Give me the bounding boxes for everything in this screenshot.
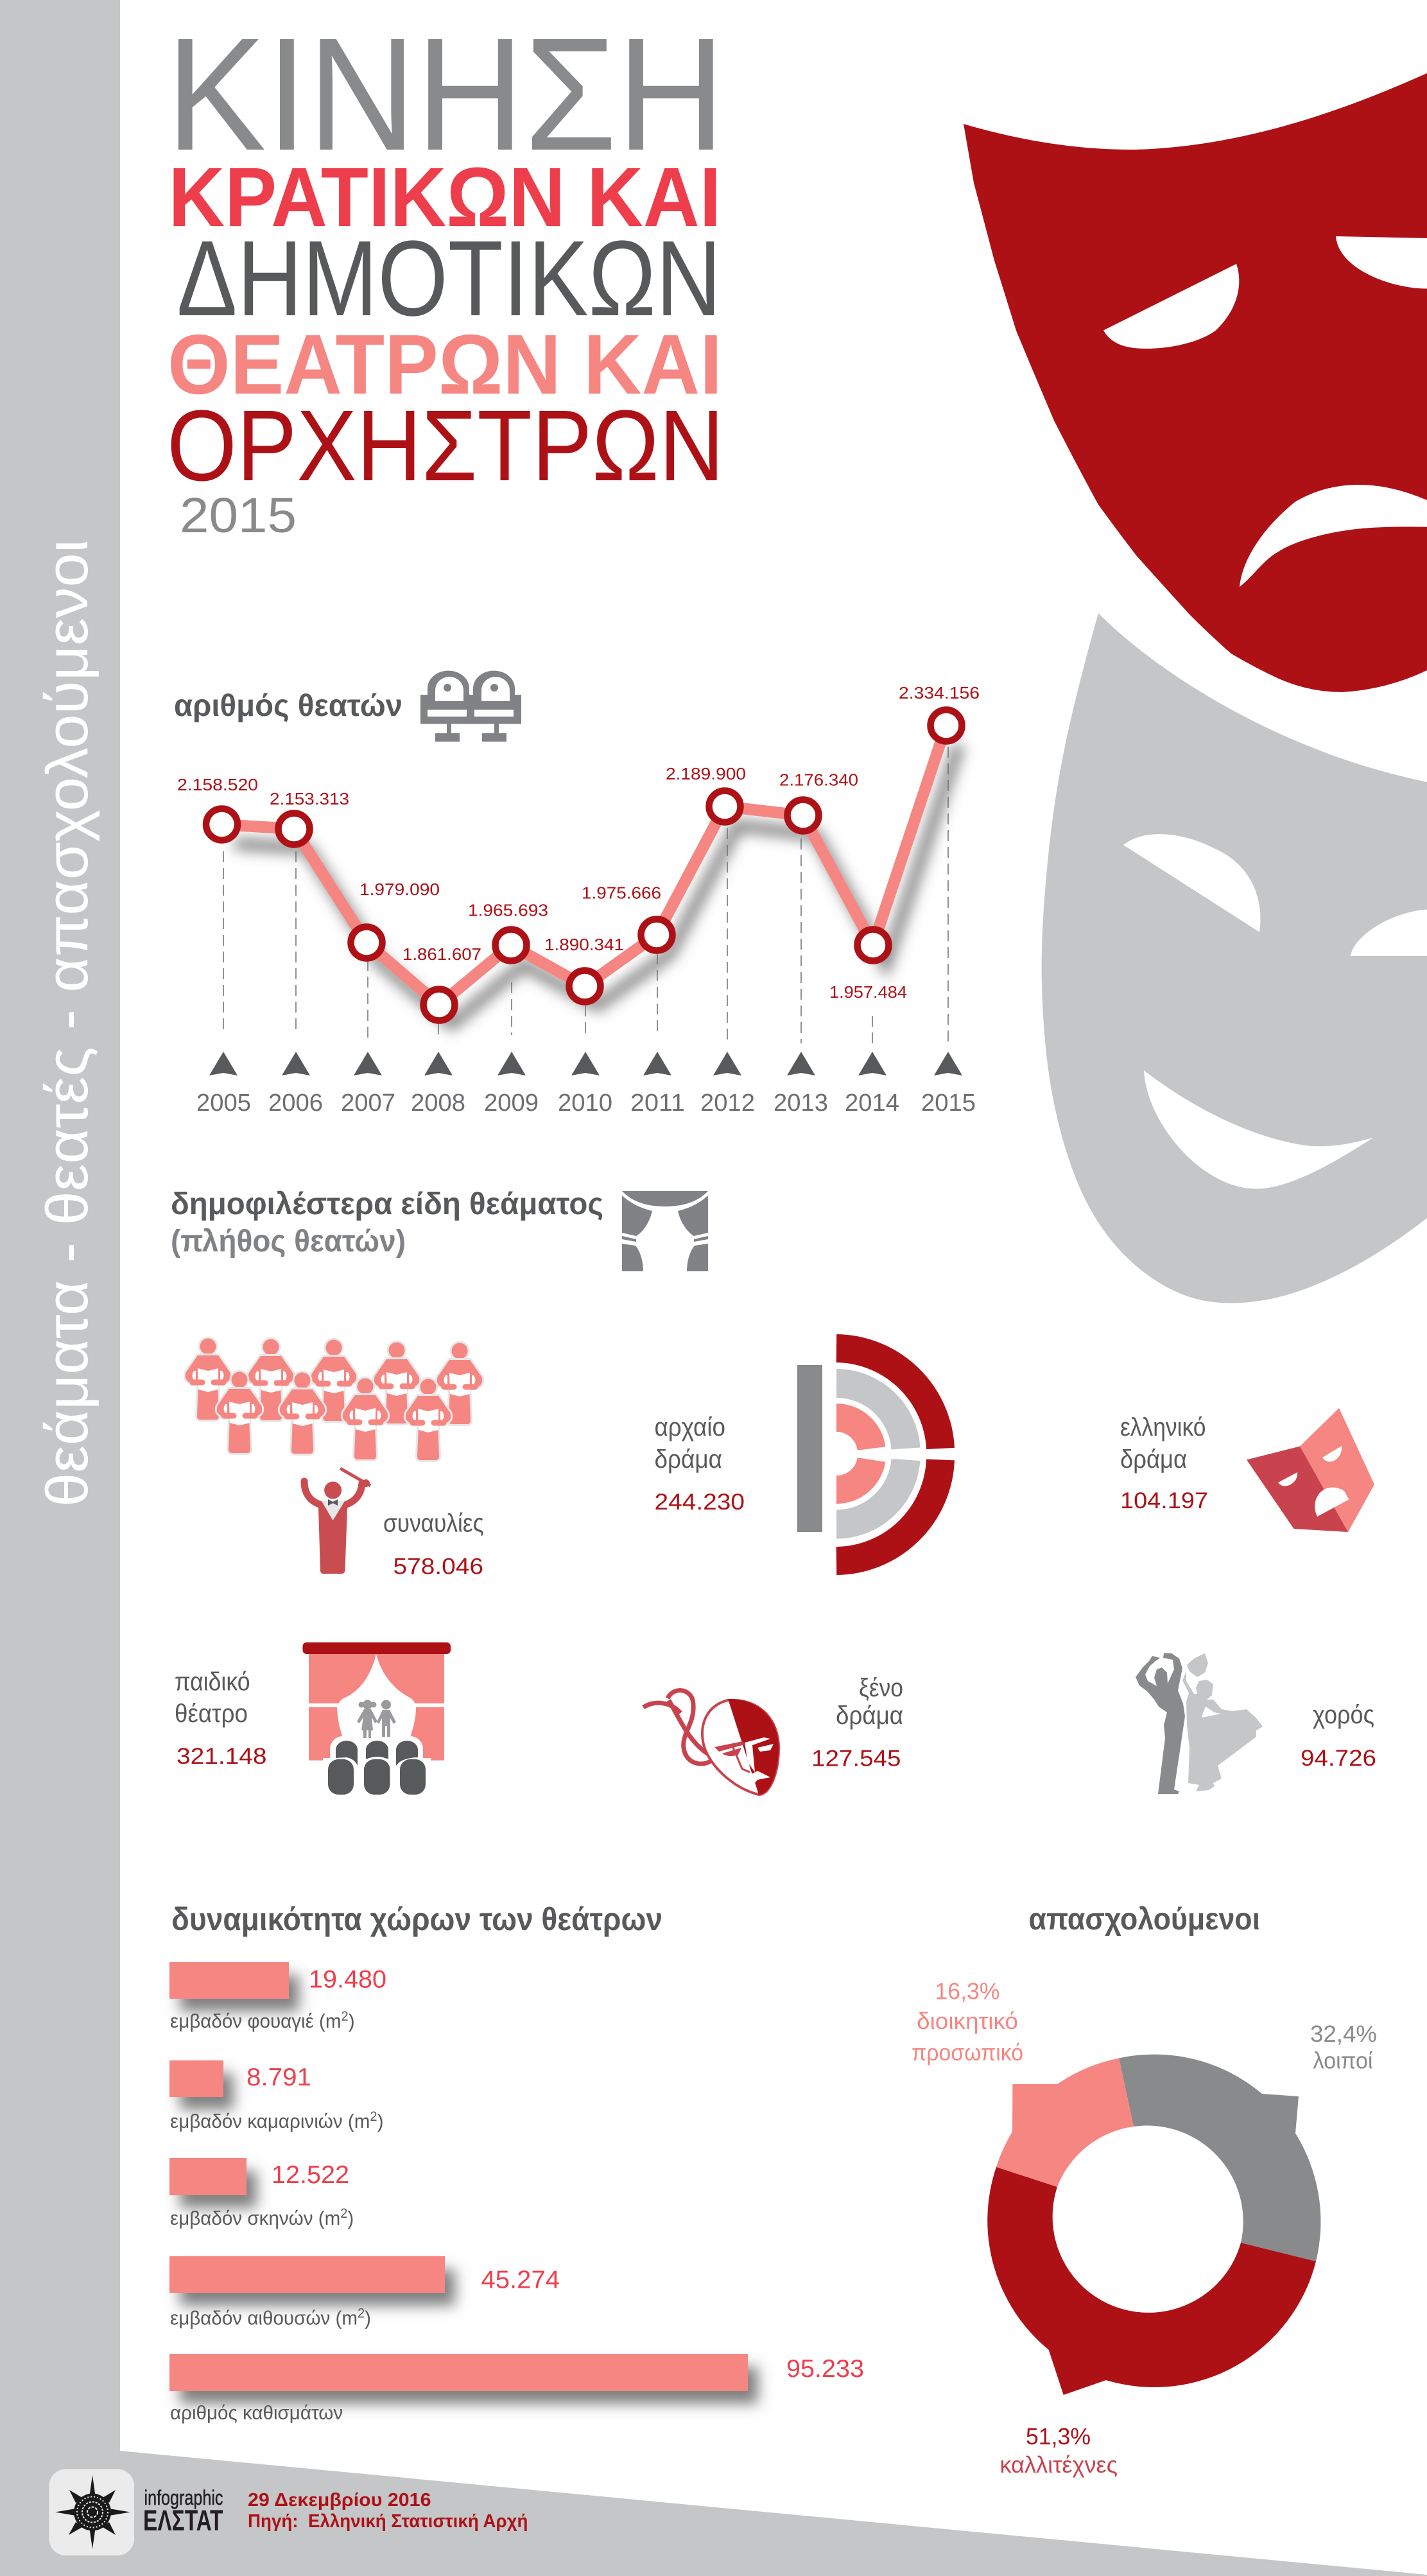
axis year labels: 2014 [845,1090,899,1117]
data value labels: 1.979.090 [359,880,440,899]
heading: employees: απασχολούμενοι [1028,1902,1260,1936]
label: administrative staff [912,1978,1023,2066]
sidebar vertical caption: θεάματα - θεατές - απασχολούμενοι [35,539,100,1507]
label: administrative staff: προσωπικό [912,2039,1023,2066]
icon: choir [186,1338,482,1460]
bar labels: 2 [342,2009,349,2024]
heading: theatre capacity: δυναμικότητα χώρων των θεάτρων [171,1901,662,1937]
icon: ancient theatre plan [797,1348,940,1561]
axis arrows [209,1052,962,1075]
data value labels: 1.975.666 [582,883,661,903]
axis year labels: 2008 [411,1090,465,1117]
bar values: 8.791 [246,2064,311,2091]
panel: theatre capacity bars [169,1901,864,2424]
title [166,4,725,543]
label: foreign drama: δράμα [836,1701,903,1730]
label: ancient drama [655,1413,725,1474]
value: children's theatre: 321.148 [177,1744,267,1769]
title year: 2015 [180,488,297,543]
label: greek drama [1120,1413,1206,1474]
icon: greek drama masks [1247,1408,1374,1532]
axis year labels [196,1090,976,1117]
data value labels: 2.153.313 [270,789,349,808]
axis year labels: 2007 [341,1090,395,1117]
axis year labels: 2010 [558,1090,612,1117]
label: greek drama: δράμα [1120,1445,1187,1474]
bar labels: ) [365,2308,371,2329]
axis year labels: 2005 [196,1090,251,1117]
data value labels: 1.861.607 [402,944,481,964]
axis year labels: 2006 [268,1090,323,1117]
bar labels: ) [349,2010,355,2032]
label: administrative staff: διοικητικό [917,2008,1018,2034]
value: greek drama: 104.197 [1120,1488,1208,1513]
data value labels: 2.334.156 [899,683,980,702]
donut segment: other staff [1119,2055,1320,2261]
bar labels: 2 [358,2306,365,2321]
wordmark: ΕΛΣΤΑΤ: ΕΛΣΤΑΤ [143,2504,223,2537]
title line: ΔΗΜΟΤΙΚΩΝ: ΔΗΜΟΤΙΚΩΝ [177,219,722,338]
label: concerts: συναυλίες [383,1509,484,1537]
label: ancient drama: δράμα [655,1445,722,1474]
label: other staff [1310,2021,1377,2074]
heading: most popular show types: δημοφιλέστερα είδη θεάματος [171,1187,603,1221]
bar labels: εμβαδόν καμαρινιών (m [170,2110,370,2132]
label: artists [1000,2423,1118,2478]
bar labels: 2 [370,2109,377,2124]
data value labels: 2.176.340 [779,770,858,790]
title line: ΚΙΝΗΣΗ: ΚΙΝΗΣΗ [166,4,725,184]
axis year labels: 2013 [774,1090,828,1117]
axis year labels: 2009 [484,1090,539,1117]
label: other staff: 32,4% [1310,2021,1377,2047]
label: foreign drama [836,1674,903,1730]
bar labels: εμβαδόν σκηνών (m [170,2207,340,2229]
bar labels: ) [377,2110,383,2132]
source line: Πηγή: Ελληνική Στατιστική Αρχή [248,2511,528,2532]
subheading: number of spectators: (πλήθος θεατών) [171,1224,406,1258]
title line: ΘΕΑΤΡΩΝ ΚΑΙ: ΘΕΑΤΡΩΝ ΚΑΙ [168,317,722,412]
data value labels: 2.158.520 [177,775,258,794]
donut segment: administrative staff [996,2058,1134,2187]
wordmark: infographic: infographic [144,2486,223,2509]
bar labels: 2 [340,2206,347,2221]
label: children's theatre: παιδικό [175,1668,250,1696]
title line: ΚΡΑΤΙΚΩΝ ΚΑΙ: ΚΡΑΤΙΚΩΝ ΚΑΙ [168,150,721,244]
bars with shadow [169,1962,748,2391]
axis year labels: 2012 [700,1090,755,1117]
icon: dancers [1136,1653,1263,1794]
panel: audience line chart [174,671,980,1117]
label: dance: χορός [1313,1701,1374,1729]
title line: ΟΡΧΗΣΤΡΩΝ: ΟΡΧΗΣΤΡΩΝ [167,390,724,502]
data value labels: 1.965.693 [468,900,548,919]
data value labels: 2.189.900 [666,764,746,783]
data value labels: 1.890.341 [544,935,624,954]
data value labels: 1.957.484 [829,982,907,1002]
value: dance: 94.726 [1301,1746,1376,1771]
bar values: 12.522 [272,2161,349,2189]
value: foreign drama: 127.545 [811,1746,901,1771]
icon: children's theatre stage [303,1642,451,1795]
data point markers [206,710,962,1021]
bar labels: ) [347,2207,354,2229]
label: artists: 51,3% [1026,2423,1091,2450]
value: concerts: 578.046 [393,1554,483,1580]
label: foreign drama: ξένο [859,1674,903,1702]
label: other staff: λοιποί [1313,2047,1372,2074]
footer [49,2469,528,2555]
bar values: 19.480 [309,1966,386,1993]
bar labels: εμβαδόν αιθουσών (m [170,2308,358,2329]
label: ancient drama: αρχαίο [655,1413,725,1441]
label: children's theatre: θέατρο [175,1700,248,1728]
axis year labels: 2015 [921,1090,976,1117]
icon: conductor [304,1468,370,1574]
bar values: 95.233 [786,2355,864,2383]
data value labels [177,683,980,1002]
label: greek drama: ελληνικό [1120,1413,1206,1441]
label: artists: καλλιτέχνες [1000,2451,1118,2478]
line with shadow [222,726,946,1005]
icon: stage curtain [622,1191,708,1271]
panel: most popular show types [171,1187,1376,1795]
bar labels: αριθμός καθισμάτων [170,2402,343,2424]
label: administrative staff: 16,3% [935,1978,1000,2005]
value: ancient drama: 244.230 [655,1490,745,1515]
panel: employees donut [912,1902,1377,2478]
icon: theatre seats [420,671,521,742]
bar labels [170,2009,383,2424]
bar values [246,1966,864,2383]
dashed drop lines [223,747,948,1043]
bar values: 45.274 [481,2267,560,2293]
bar labels: εμβαδόν φουαγιέ (m [170,2010,342,2032]
label: children's theatre [175,1668,250,1728]
logo badge [49,2469,134,2555]
red tragedy mask [964,73,1427,692]
donut segment: artists [987,2167,1316,2395]
grey comedy mask [1042,613,1427,1303]
publication date: 29 Δεκεμβρίου 2016 [248,2490,431,2511]
axis year labels: 2011 [630,1090,685,1117]
heading: number of spectators: αριθμός θεατών [174,689,402,723]
icon: foreign drama mask with ribbons [643,1691,779,1795]
